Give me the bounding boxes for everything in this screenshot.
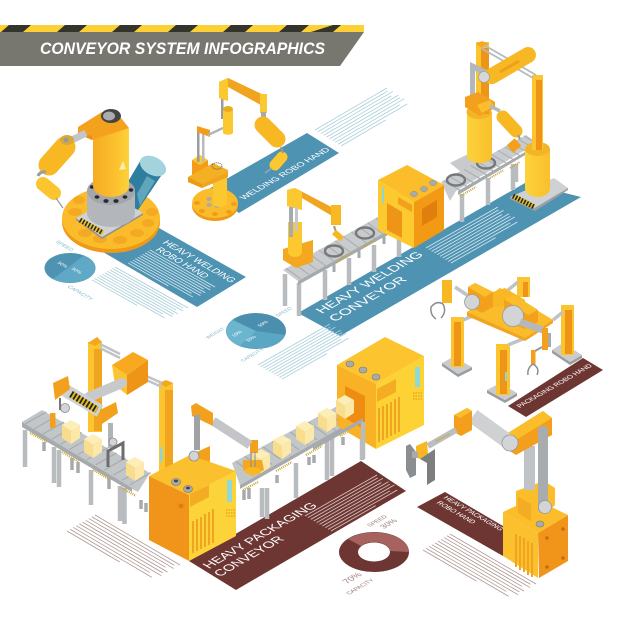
conveyor legs right — [262, 427, 362, 519]
text block: heavy welding band lines — [128, 250, 215, 300]
pie chart: speed and capacity: 50% — [55, 261, 70, 269]
pie chart: weight speed capacity: WEIGHT — [205, 327, 227, 340]
pie chart: speed and capacity: 50% — [69, 267, 84, 275]
pie chart: weight speed capacity: SPEED — [275, 306, 295, 318]
pie chart: weight speed capacity: 15% — [231, 330, 245, 338]
text block: heavy packaging conveyor description — [67, 515, 180, 581]
pie chart: weight speed capacity: CAPACITY — [240, 347, 267, 363]
gantry feet — [442, 343, 582, 403]
donut chart: speed and capacity: CAPACITY — [346, 578, 376, 596]
packaging boxes right — [252, 395, 354, 473]
text block: welding robo hand description — [315, 88, 413, 146]
panel text: heavy packaging robo hand: ROBO HAND — [434, 500, 477, 525]
back hand with claw — [431, 280, 452, 319]
panel text: heavy welding conveyor: CONVEYOR — [325, 274, 410, 324]
small robot arm on conveyor — [283, 188, 342, 268]
text block: heavy welding conveyor band lines — [426, 207, 523, 263]
panel text: heavy welding conveyor: HEAVY WELDING — [312, 249, 427, 316]
gantry posts — [451, 277, 574, 395]
gripper arm with hazard bar — [50, 376, 123, 467]
panel text: heavy welding robo hand: ROBO HAND — [152, 246, 211, 280]
panel text: heavy packaging conveyor: HEAVY PACKAGING — [199, 500, 321, 571]
panel: packaging robo hand band — [508, 358, 603, 417]
title: CONVEYOR SYSTEM INFOGRAPHICS — [40, 39, 326, 58]
machine: heavy welding robo hand — [38, 109, 170, 253]
text block: heavy welding description — [92, 267, 188, 321]
machine: packaging robo hand — [431, 277, 582, 403]
text block: heavy welding conveyor description — [258, 324, 354, 379]
pie chart: speed and capacity: SPEED — [53, 240, 75, 252]
machine: heavy packaging robo hand — [406, 408, 568, 578]
machine: heavy welding conveyor — [283, 41, 568, 316]
conveyor segment right — [437, 135, 541, 222]
conveyor segment left — [283, 213, 400, 316]
pie chart: weight speed capacity: 50% — [257, 320, 271, 328]
panel text: packaging robo hand: PACKAGING ROBO HAND — [516, 363, 594, 409]
donut chart: speed and capacity — [339, 515, 409, 596]
conveyor legs left — [25, 430, 124, 524]
gantry post right and rods — [88, 337, 173, 473]
panel text: heavy welding conveyor — [312, 249, 427, 324]
control box — [378, 165, 444, 248]
pie chart: speed and capacity — [44, 240, 96, 302]
conveyor belt left — [22, 410, 151, 496]
panel: heavy packaging robo hand band — [417, 492, 504, 556]
header banner — [0, 25, 364, 66]
panel: heavy welding conveyor band — [298, 183, 581, 336]
welding arm gantry — [465, 41, 568, 211]
panel: heavy packaging conveyor band — [189, 461, 406, 590]
box arm and gripper — [191, 403, 264, 476]
panel: heavy welding robo hand band — [103, 228, 246, 307]
gantry post left — [88, 342, 102, 432]
cabinet right — [337, 337, 424, 449]
conveyor belt right — [232, 402, 363, 490]
panel text: heavy welding robo hand: HEAVY WELDING — [159, 239, 238, 285]
pie chart: weight speed capacity: 35% — [245, 335, 259, 343]
donut chart: speed and capacity: 70% — [340, 571, 364, 585]
text block: heavy packaging robo hand description — [423, 534, 536, 600]
panel text: heavy packaging robo hand: HEAVY PACKAGING — [441, 495, 504, 532]
cabinet left — [149, 446, 236, 561]
text block: heavy packaging conveyor band lines — [305, 475, 403, 531]
panel text: welding robo hand: WELDING ROBO HAND — [237, 146, 332, 201]
panel text: heavy packaging conveyor: CONVEYOR — [210, 534, 288, 579]
gantry body — [464, 283, 553, 341]
panel: welding robo hand band — [207, 133, 339, 213]
donut chart: speed and capacity: 30% — [378, 518, 400, 530]
front hand with claw — [528, 328, 551, 375]
packaging boxes left — [62, 420, 144, 481]
machine: welding robo hand — [188, 78, 283, 221]
machine: heavy packaging conveyor — [22, 337, 363, 561]
gantry cube — [112, 352, 148, 395]
pie chart: weight speed capacity — [205, 306, 295, 363]
pie chart: speed and capacity: CAPACITY — [65, 285, 94, 302]
conveyor end boxes — [313, 395, 363, 459]
donut chart: speed and capacity: SPEED — [367, 515, 390, 528]
